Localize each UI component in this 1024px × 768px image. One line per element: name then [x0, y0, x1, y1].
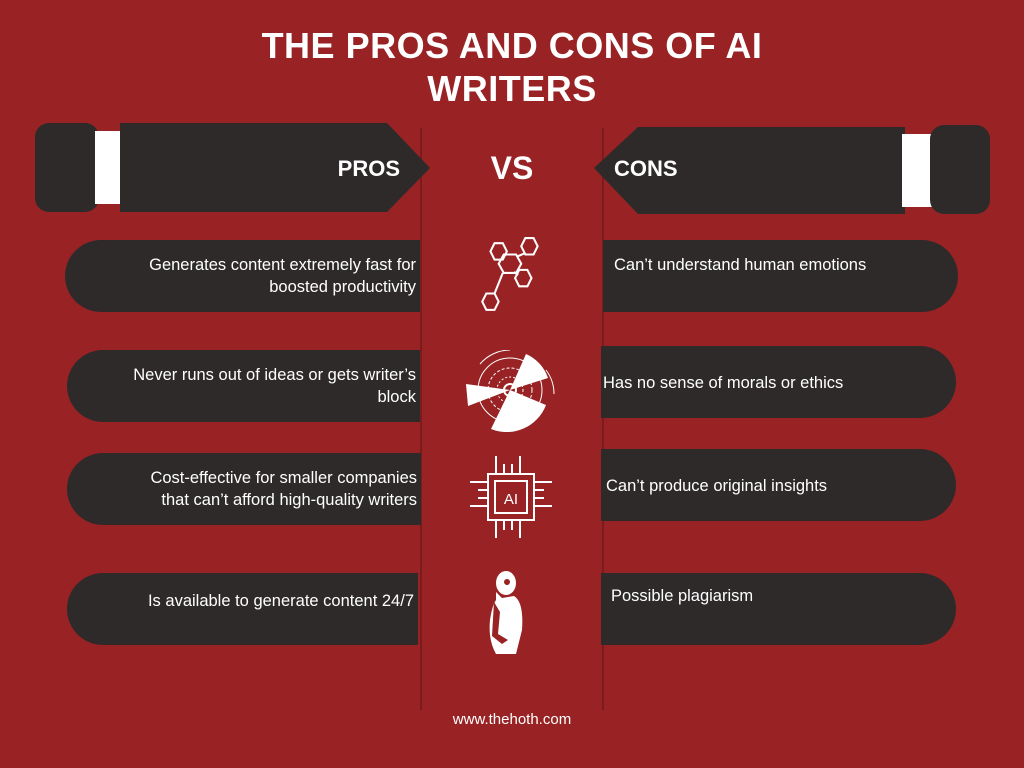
pro 3: Cost-effective for smaller companies	[150, 469, 417, 487]
header: cons: CONS	[614, 156, 678, 181]
title: WRITERS	[427, 68, 597, 109]
title	[262, 25, 762, 109]
icon: AI chip: AI	[504, 491, 518, 508]
pro 2: block	[377, 388, 416, 406]
header: cons	[594, 125, 990, 214]
icon: hexagons	[481, 237, 539, 311]
con 3: Can’t produce original insights	[606, 477, 827, 495]
con 1: Can’t understand human emotions	[614, 256, 866, 274]
vs label: VS	[491, 150, 533, 186]
header: pros	[35, 123, 430, 212]
header: pros: PROS	[338, 156, 400, 181]
pro 2	[67, 350, 420, 422]
icon: radial tech	[466, 350, 554, 432]
con 4	[601, 573, 956, 645]
pro 4	[67, 573, 418, 645]
pro 3	[67, 453, 421, 525]
con 4: Possible plagiarism	[611, 587, 753, 605]
con 3	[601, 449, 956, 521]
con 2	[601, 346, 956, 418]
pro 2: Never runs out of ideas or gets writer’s	[133, 366, 416, 384]
footer url: www.thehoth.com	[453, 711, 571, 728]
pro 1: Generates content extremely fast for	[149, 256, 416, 274]
pro 3: that can’t afford high-quality writers	[161, 491, 417, 509]
icon: AI chip	[470, 456, 552, 538]
pro 1	[65, 240, 420, 312]
con 2: Has no sense of morals or ethics	[603, 374, 843, 392]
con 1	[603, 240, 958, 312]
pro 4: Is available to generate content 24/7	[148, 592, 414, 610]
pro 1: boosted productivity	[269, 278, 416, 296]
title: THE PROS AND CONS OF AI	[262, 25, 762, 66]
icon: thinking robot	[490, 571, 522, 654]
